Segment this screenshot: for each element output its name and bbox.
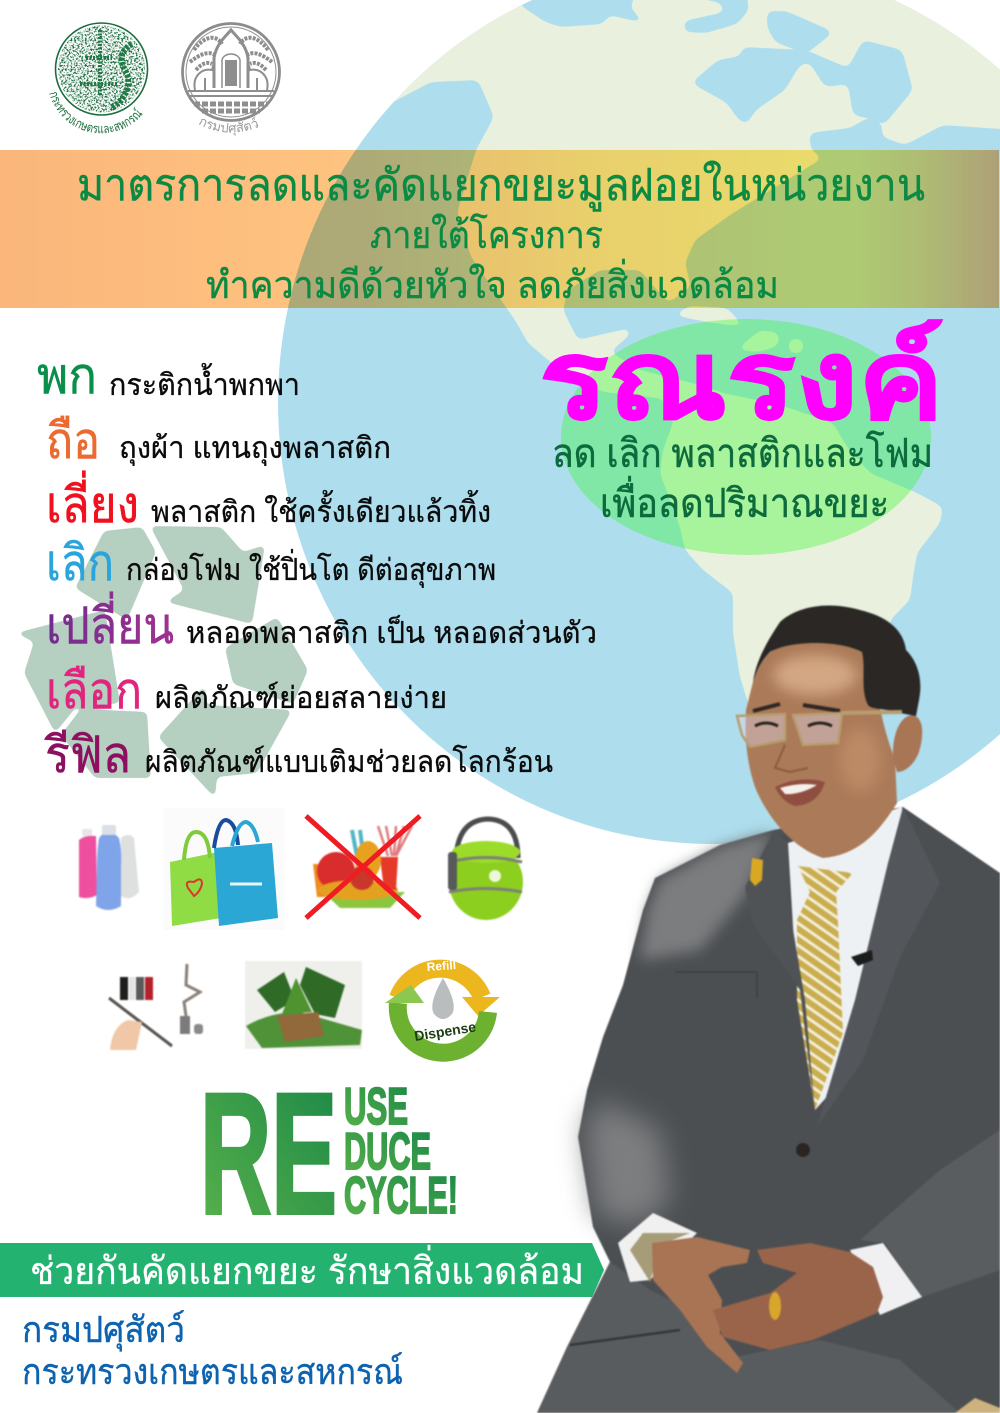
right hand [713,1243,883,1350]
title [77,160,925,307]
logo: Department of Livestock seal [181,22,281,136]
portrait of official [537,606,1000,1413]
organization credit: กรมปศุสัตว์ [22,1309,185,1352]
right sleeve [860,1130,1000,1297]
icon: banana-leaf food [245,961,362,1049]
item: quit [46,535,496,591]
forehead highlight [773,655,857,695]
icon: refill cycle: Refill [426,958,456,974]
shoulder highlight [640,832,773,960]
green highlight ellipse [561,319,931,555]
glasses [737,712,902,747]
neck and face [745,629,897,858]
tie [797,866,853,1110]
green slogan ribbon: ช่วยกันคัดแยกขยะ รักษาสิ่งแวดล้อม [30,1245,584,1293]
item: choose [46,663,447,719]
item: change: เปลี่ยน [46,592,174,654]
shirt [788,807,905,1110]
title: ภายใต้โครงการ [370,213,603,257]
item: hold: ถุงผ้า แทนถุงพลาสติก [119,432,391,467]
item: carry: กระติกน้ำพกพา [109,363,300,402]
mouth [775,779,825,806]
eyes [755,723,832,726]
title: มาตรการลดและคัดแยกขยะมูลฝอยในหน่วยงาน [77,160,925,212]
elbow highlight [585,1100,670,1225]
ear [893,715,922,772]
logo: Ministry of Agriculture seal [49,22,148,134]
right cuff [850,1243,922,1315]
item: hold [46,413,391,469]
logo: Reuse Reduce Recycle: RE [200,1058,337,1250]
item: quit: กล่องโฟม ใช้ปิ่นโต ดีต่อสุขภาพ [126,549,496,589]
seal caption: กรมปศุสัตว์ [199,116,258,136]
icon: personal straw [109,964,203,1050]
campaign heading: รณรงค์ [540,319,944,442]
logo: Reuse Reduce Recycle: DUCE [344,1123,431,1181]
logo: Reuse Reduce Recycle: CYCLE! [344,1167,458,1225]
red cross [306,816,420,918]
nose [775,745,808,772]
icon: refill cycle: Dispense [413,1018,477,1044]
item: carry [37,348,300,404]
item: refill [44,727,553,783]
icon: refill cycle [385,958,500,1053]
item: refill: ผลิตภัณฑ์แบบเติมช่วยลดโลกร้อน [145,744,553,779]
item: refill: รีฟิล [44,727,131,783]
chair [955,1398,1000,1413]
left cuff [618,1213,697,1282]
item: avoid: พลาสติก ใช้ครั้งเดียวแล้วทิ้ง [151,490,491,529]
item: avoid: เลี่ยง [46,471,139,533]
globe background [278,0,1000,844]
suit [537,807,1000,1413]
button [796,1143,810,1157]
icon: water bottles [79,825,139,910]
ocean [278,0,1000,844]
item: change [46,592,597,654]
organization credit [22,1309,403,1392]
organization credit: กระทรวงเกษตรและสหกรณ์ [22,1351,403,1392]
title: ทำความดีด้วยหัวใจ ลดภัยสิ่งแวดล้อม [206,259,779,307]
seal caption: กระทรวงเกษตรและสหกรณ์ [49,92,142,134]
hair [753,606,920,716]
item: change: หลอดพลาสติก เป็น หลอดส่วนตัว [186,614,597,650]
left hand [652,1237,750,1373]
campaign subtitle [552,431,933,526]
lapel pin [750,858,763,886]
icon: lunch box [448,819,523,920]
microphone [851,950,873,966]
ring [769,1292,781,1320]
action list [37,348,597,783]
item: choose: ผลิตภัณฑ์ย่อยสลายง่าย [155,681,447,715]
item: hold: ถือ [46,413,100,469]
icon: crossed-out plastic ware [306,816,420,918]
continents [394,0,1000,711]
campaign subtitle: เพื่อลดปริมาณขยะ [600,476,889,526]
trousers [537,1262,960,1413]
item: carry: พก [37,348,97,404]
pocket [675,972,757,998]
recycle symbol watermark [16,526,308,798]
header banner [0,150,999,308]
eyebrows [753,704,840,711]
item: choose: เลือก [46,663,142,719]
lapels [745,832,815,1112]
campaign subtitle: ลด เลิก พลาสติกและโฟม [552,431,933,476]
item: quit: เลิก [46,535,114,591]
watch [630,1233,690,1282]
icon: cloth bags [163,808,285,930]
item: avoid [46,471,491,533]
logo: Reuse Reduce Recycle: USE [344,1078,408,1136]
cheek highlight [840,728,880,792]
